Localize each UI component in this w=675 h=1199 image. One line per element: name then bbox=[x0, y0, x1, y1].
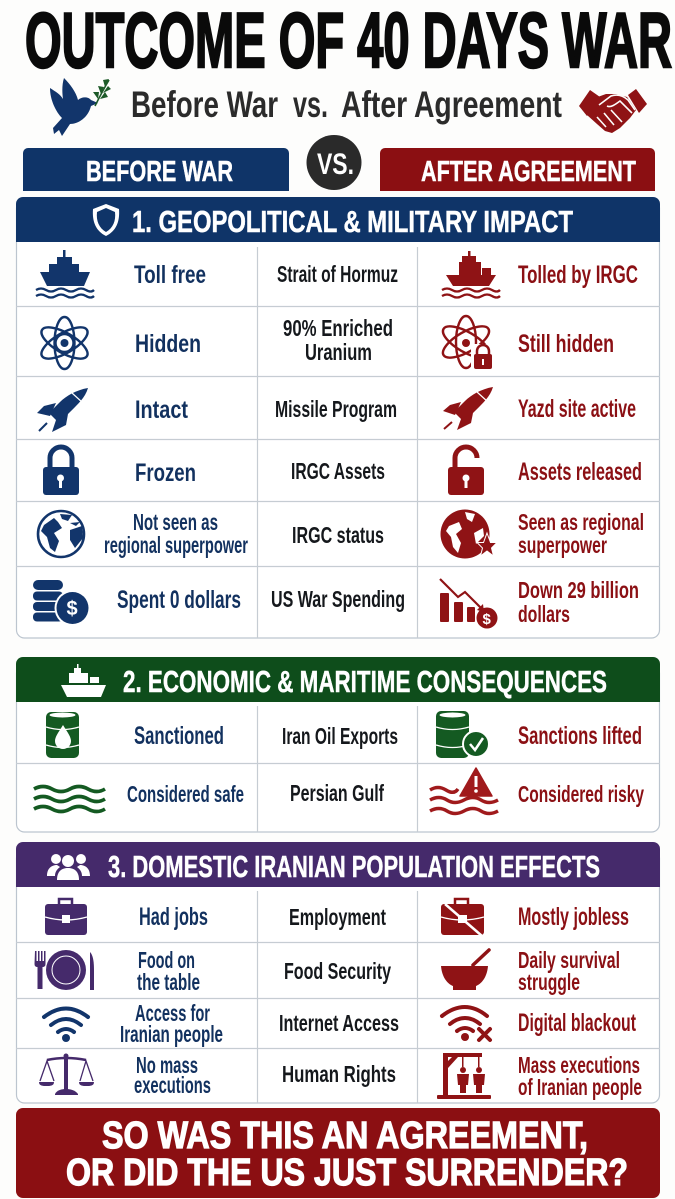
text: us war spending: US War Spending bbox=[271, 586, 405, 612]
icon: globe with star bbox=[440, 510, 497, 558]
text: mass executions of iranian people bbox=[518, 1052, 642, 1100]
text: seen as regional superpower bbox=[518, 509, 644, 558]
icon: crossed out briefcase bbox=[441, 899, 484, 936]
text: had jobs: Had jobs bbox=[139, 903, 208, 931]
text: access for iranian people: Access for bbox=[135, 1000, 210, 1026]
text: human rights: Human Rights bbox=[282, 1061, 396, 1087]
icon: open padlock bbox=[448, 447, 484, 495]
icon: plate with fork and knife bbox=[34, 950, 94, 990]
icon: ship after bbox=[442, 251, 500, 298]
text: daily survival struggle bbox=[518, 947, 620, 995]
text: sanctioned: Sanctioned bbox=[134, 722, 224, 750]
icon: oil barrel with check bbox=[436, 711, 489, 758]
text: strait of hormuz: Strait of Hormuz bbox=[277, 261, 398, 287]
text: still hidden: Still hidden bbox=[518, 330, 614, 358]
text: no mass executions bbox=[134, 1052, 211, 1098]
text: intact: Intact bbox=[135, 396, 189, 424]
text: frozen: Frozen bbox=[135, 459, 196, 487]
panel: after agreement label bbox=[380, 148, 655, 191]
icon: briefcase bbox=[45, 899, 87, 935]
text: not seen as regional superpower bbox=[104, 509, 248, 558]
text: no mass executions: executions bbox=[134, 1072, 211, 1098]
text: food security: Food Security bbox=[284, 958, 391, 984]
text: persian gulf: Persian Gulf bbox=[290, 780, 384, 806]
text: iran oil exports: Iran Oil Exports bbox=[282, 723, 398, 749]
text: toll free: Toll free bbox=[134, 261, 206, 289]
text: food on the table: Food on bbox=[138, 947, 195, 973]
closing banner bbox=[16, 1108, 660, 1198]
icon: falling chart and dollar bbox=[440, 579, 498, 628]
icon: atom before bbox=[37, 317, 92, 369]
icon: ship before bbox=[36, 250, 94, 298]
text: irgc status: IRGC status bbox=[292, 522, 384, 548]
text: enriched uranium bbox=[283, 315, 393, 365]
text: considered safe: Considered safe bbox=[127, 781, 244, 807]
text: food on the table: the table bbox=[137, 969, 200, 995]
icon: wifi blocked bbox=[442, 1007, 490, 1041]
icon: bowl and spoon bbox=[441, 950, 489, 990]
panel: before war label: BEFORE WAR bbox=[86, 156, 233, 188]
text: daily survival struggle: Daily survival bbox=[518, 947, 620, 973]
icon: coins and dollar bbox=[33, 580, 90, 626]
icon: people white bbox=[47, 854, 90, 880]
text: internet access: Internet Access bbox=[279, 1010, 399, 1036]
text: daily survival struggle: struggle bbox=[518, 969, 580, 995]
icon: calm waves bbox=[34, 786, 105, 812]
subtitle: vs. bbox=[293, 84, 328, 125]
icon: rocket before bbox=[37, 388, 88, 432]
text: down 29 billion dollars bbox=[518, 577, 639, 627]
subtitle: After Agreement bbox=[341, 84, 562, 125]
icon: cargo ship white bbox=[61, 664, 106, 697]
text: enriched uranium: 90% Enriched bbox=[283, 315, 393, 341]
icon: coins and dollar: $ bbox=[66, 598, 78, 620]
vs badge bbox=[306, 135, 362, 190]
text: seen as regional superpower: superpower bbox=[518, 532, 607, 558]
icon: dove with olive branch bbox=[50, 78, 111, 136]
closing banner: SO WAS THIS AN AGREEMENT, bbox=[102, 1115, 588, 1157]
icon: scales of justice bbox=[39, 1054, 94, 1095]
text: irgc assets: IRGC Assets bbox=[291, 458, 385, 484]
panel: domestic iranian population effects bbox=[16, 842, 660, 1103]
icon: risky waves with warning bbox=[430, 768, 498, 814]
icon: shield bbox=[93, 204, 119, 236]
icon: gallows bbox=[437, 1053, 491, 1099]
text: food on the table bbox=[137, 947, 200, 995]
text: access for iranian people bbox=[120, 1000, 223, 1047]
text: access for iranian people: Iranian people bbox=[120, 1021, 223, 1047]
vs badge: VS. bbox=[317, 148, 354, 181]
panel: economic and maritime consequences bbox=[16, 657, 660, 832]
icon: globe before bbox=[38, 511, 84, 557]
panel: before war label bbox=[23, 148, 289, 191]
text: spent 0 dollars: Spent 0 dollars bbox=[117, 586, 241, 614]
text: missile program: Missile Program bbox=[275, 396, 397, 422]
panel: geopolitical and military impact bbox=[16, 197, 660, 638]
icon: closed padlock bbox=[43, 447, 79, 495]
icon: atom with padlock bbox=[438, 316, 495, 372]
text: hidden: Hidden bbox=[135, 330, 201, 358]
icon: rocket after bbox=[443, 387, 493, 430]
text: not seen as regional superpower: Not seen as bbox=[133, 509, 218, 535]
text: employment: Employment bbox=[289, 904, 386, 930]
text: not seen as regional superpower: regional superpower bbox=[104, 532, 248, 558]
icon: falling chart and dollar: $ bbox=[482, 611, 492, 628]
text: down 29 billion dollars: dollars bbox=[518, 601, 570, 627]
text: enriched uranium: Uranium bbox=[305, 339, 372, 365]
icon: handshake bbox=[579, 89, 647, 133]
subtitle: Before War bbox=[131, 84, 278, 125]
icon: wifi bbox=[44, 1008, 88, 1042]
subtitle bbox=[131, 84, 562, 125]
text: no mass executions: No mass bbox=[136, 1052, 198, 1078]
icon: oil barrel with drop bbox=[46, 712, 79, 758]
